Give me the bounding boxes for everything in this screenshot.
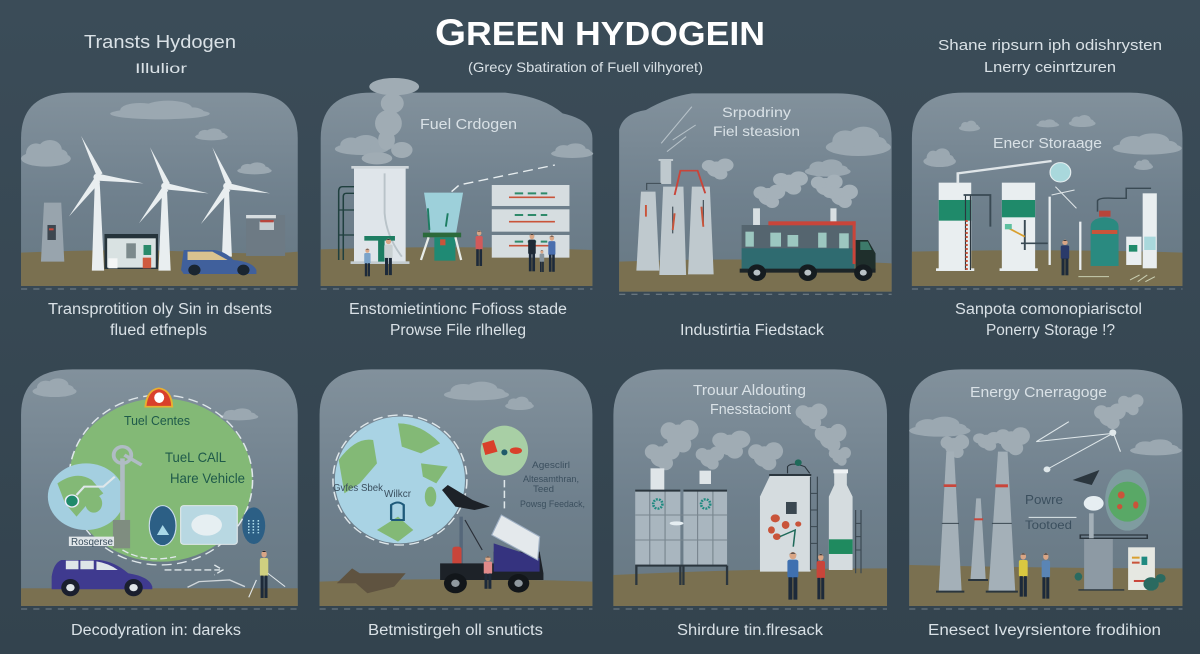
panel: globe and truck — [320, 369, 592, 639]
panel heading: Srpodriny — [722, 104, 791, 120]
caption: Prowse File rlhelleg — [390, 322, 526, 339]
globe labels: TueL CAlL — [165, 449, 226, 465]
caption: Industirtia Fiedstack — [680, 322, 824, 339]
caption: Ponerry Storage !? — [986, 322, 1115, 339]
caption: Betmistirgeh oll snuticts — [368, 622, 543, 639]
caption: flued etfnepls — [110, 322, 207, 339]
left header: Illulior — [135, 60, 187, 76]
title: GREEN HYDOGEIN — [435, 12, 765, 53]
subtitle: (Grecy Sbatiration of Fuell vilhyoret) — [468, 59, 703, 75]
caption: Enesect Iveyrsientore frodihion — [928, 622, 1161, 639]
panel: fuel cell vehicle — [21, 369, 298, 639]
caption: Shirdure tin.flresack — [677, 622, 823, 639]
panel heading: Fnesstaciont — [710, 401, 792, 418]
globe labels: Wilkcr — [384, 489, 412, 500]
panel heading: Enecr Storaage — [993, 135, 1102, 152]
panel heading: Trouur Aldouting — [693, 382, 806, 399]
left header: Transts Hydogen — [84, 32, 236, 52]
caption: Decodyration in: dareks — [71, 622, 241, 639]
panel: industrial feedstock — [619, 93, 892, 339]
panel: power chimneys — [909, 369, 1182, 639]
panel: wind turbines — [21, 93, 298, 339]
chart labels: Tootoed — [1025, 518, 1072, 532]
panel heading — [713, 104, 800, 139]
caption: Enstomietintionc Fofioss stade — [349, 301, 567, 318]
caption: Transprotition oly Sin in dsents — [48, 301, 272, 318]
chart labels: Powre — [1025, 492, 1063, 507]
globe labels: Tuel Centes — [124, 413, 190, 428]
chart labels — [1025, 492, 1072, 532]
left header — [84, 32, 236, 76]
globe labels: Altesamthran, — [523, 474, 579, 485]
globe labels: Powsg Feedack, — [520, 499, 585, 510]
right header: Lnerry ceinrtzuren — [984, 59, 1116, 76]
panel: energy storage — [912, 93, 1182, 339]
panel: factory — [613, 369, 887, 639]
globe labels: Hare Vehicle — [170, 470, 245, 486]
panel heading: Fuel Crdogen — [420, 116, 517, 133]
panel heading: Fiel steasion — [713, 123, 800, 139]
panel: fuel production — [321, 78, 593, 339]
caption — [349, 301, 567, 339]
panel heading: Energy Cnerragoge — [970, 384, 1107, 401]
globe labels — [71, 413, 245, 548]
caption — [955, 301, 1142, 339]
globe labels — [333, 460, 585, 510]
globe labels: Rosqerse — [71, 536, 113, 548]
globe labels: Teed — [533, 484, 554, 495]
caption: Sanpota comonopiarisctol — [955, 301, 1142, 318]
globe labels: Agesclirl — [532, 460, 570, 471]
panel heading — [693, 382, 806, 418]
right header — [938, 37, 1162, 76]
globe labels: Gvfes Sbek — [333, 483, 384, 494]
right header: Shane ripsurn iph odishrysten — [938, 37, 1162, 54]
caption — [48, 301, 272, 339]
